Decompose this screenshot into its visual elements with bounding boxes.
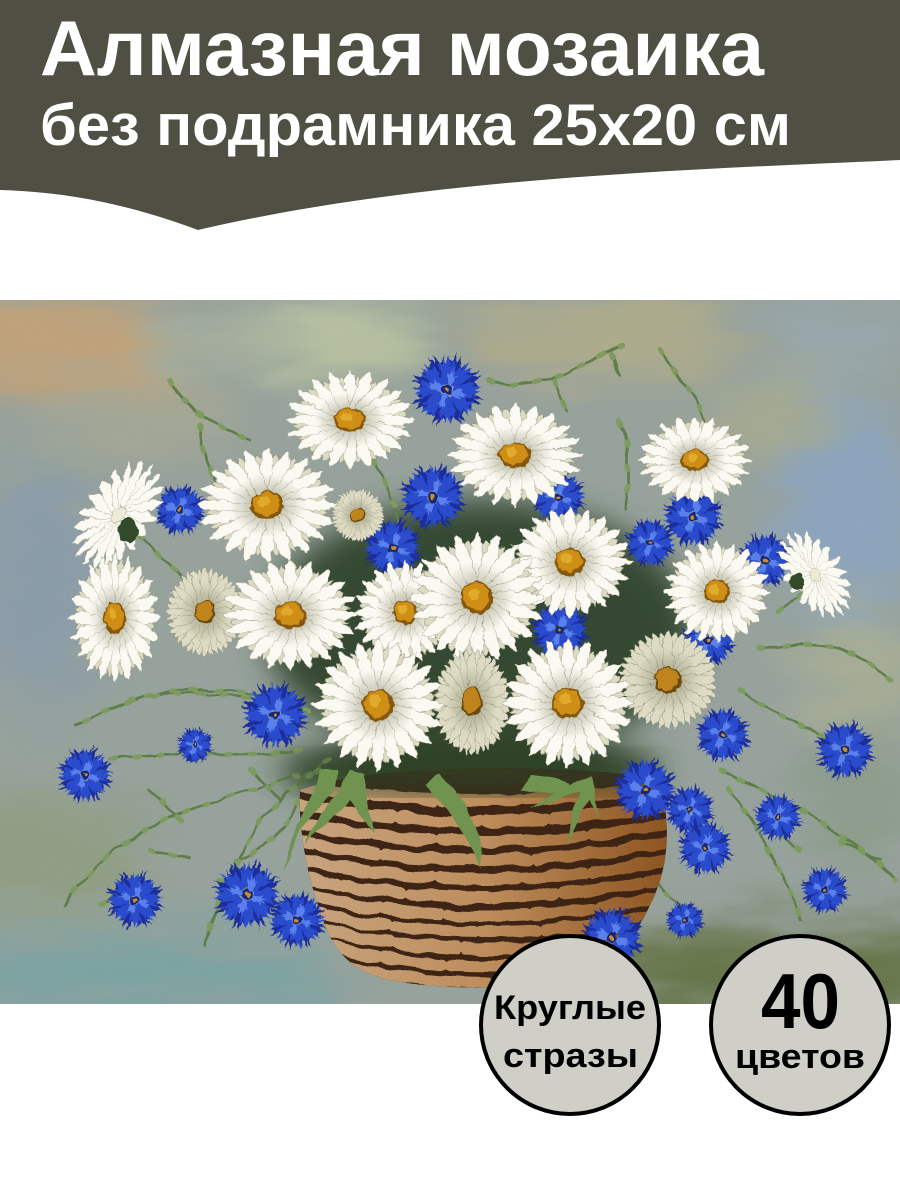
dark foliage mass [265,500,695,800]
badge: round rhinestones [481,936,659,1114]
cornflowers behind daisies [54,351,878,973]
painting: daisies and cornflowers in a basket [0,295,900,1025]
badge label: rhinestones: стразы [503,1037,638,1075]
small leaves along stems [65,345,895,945]
leaves over the basket [285,770,600,870]
thin stems [65,345,895,945]
painted background [0,295,900,1025]
wicker basket [290,768,680,987]
badge label: round: Круглые [494,989,646,1027]
header banner [0,0,900,230]
title: Алмазная мозаика [40,4,765,92]
daisies [53,370,868,771]
badge: 40 colours [711,936,889,1114]
badge label: colours: цветов [735,1038,865,1076]
number 40: 40 [761,957,840,1045]
subtitle: без подрамника 25х20 см [40,93,791,158]
dark foliage over the basket rim [285,756,655,788]
